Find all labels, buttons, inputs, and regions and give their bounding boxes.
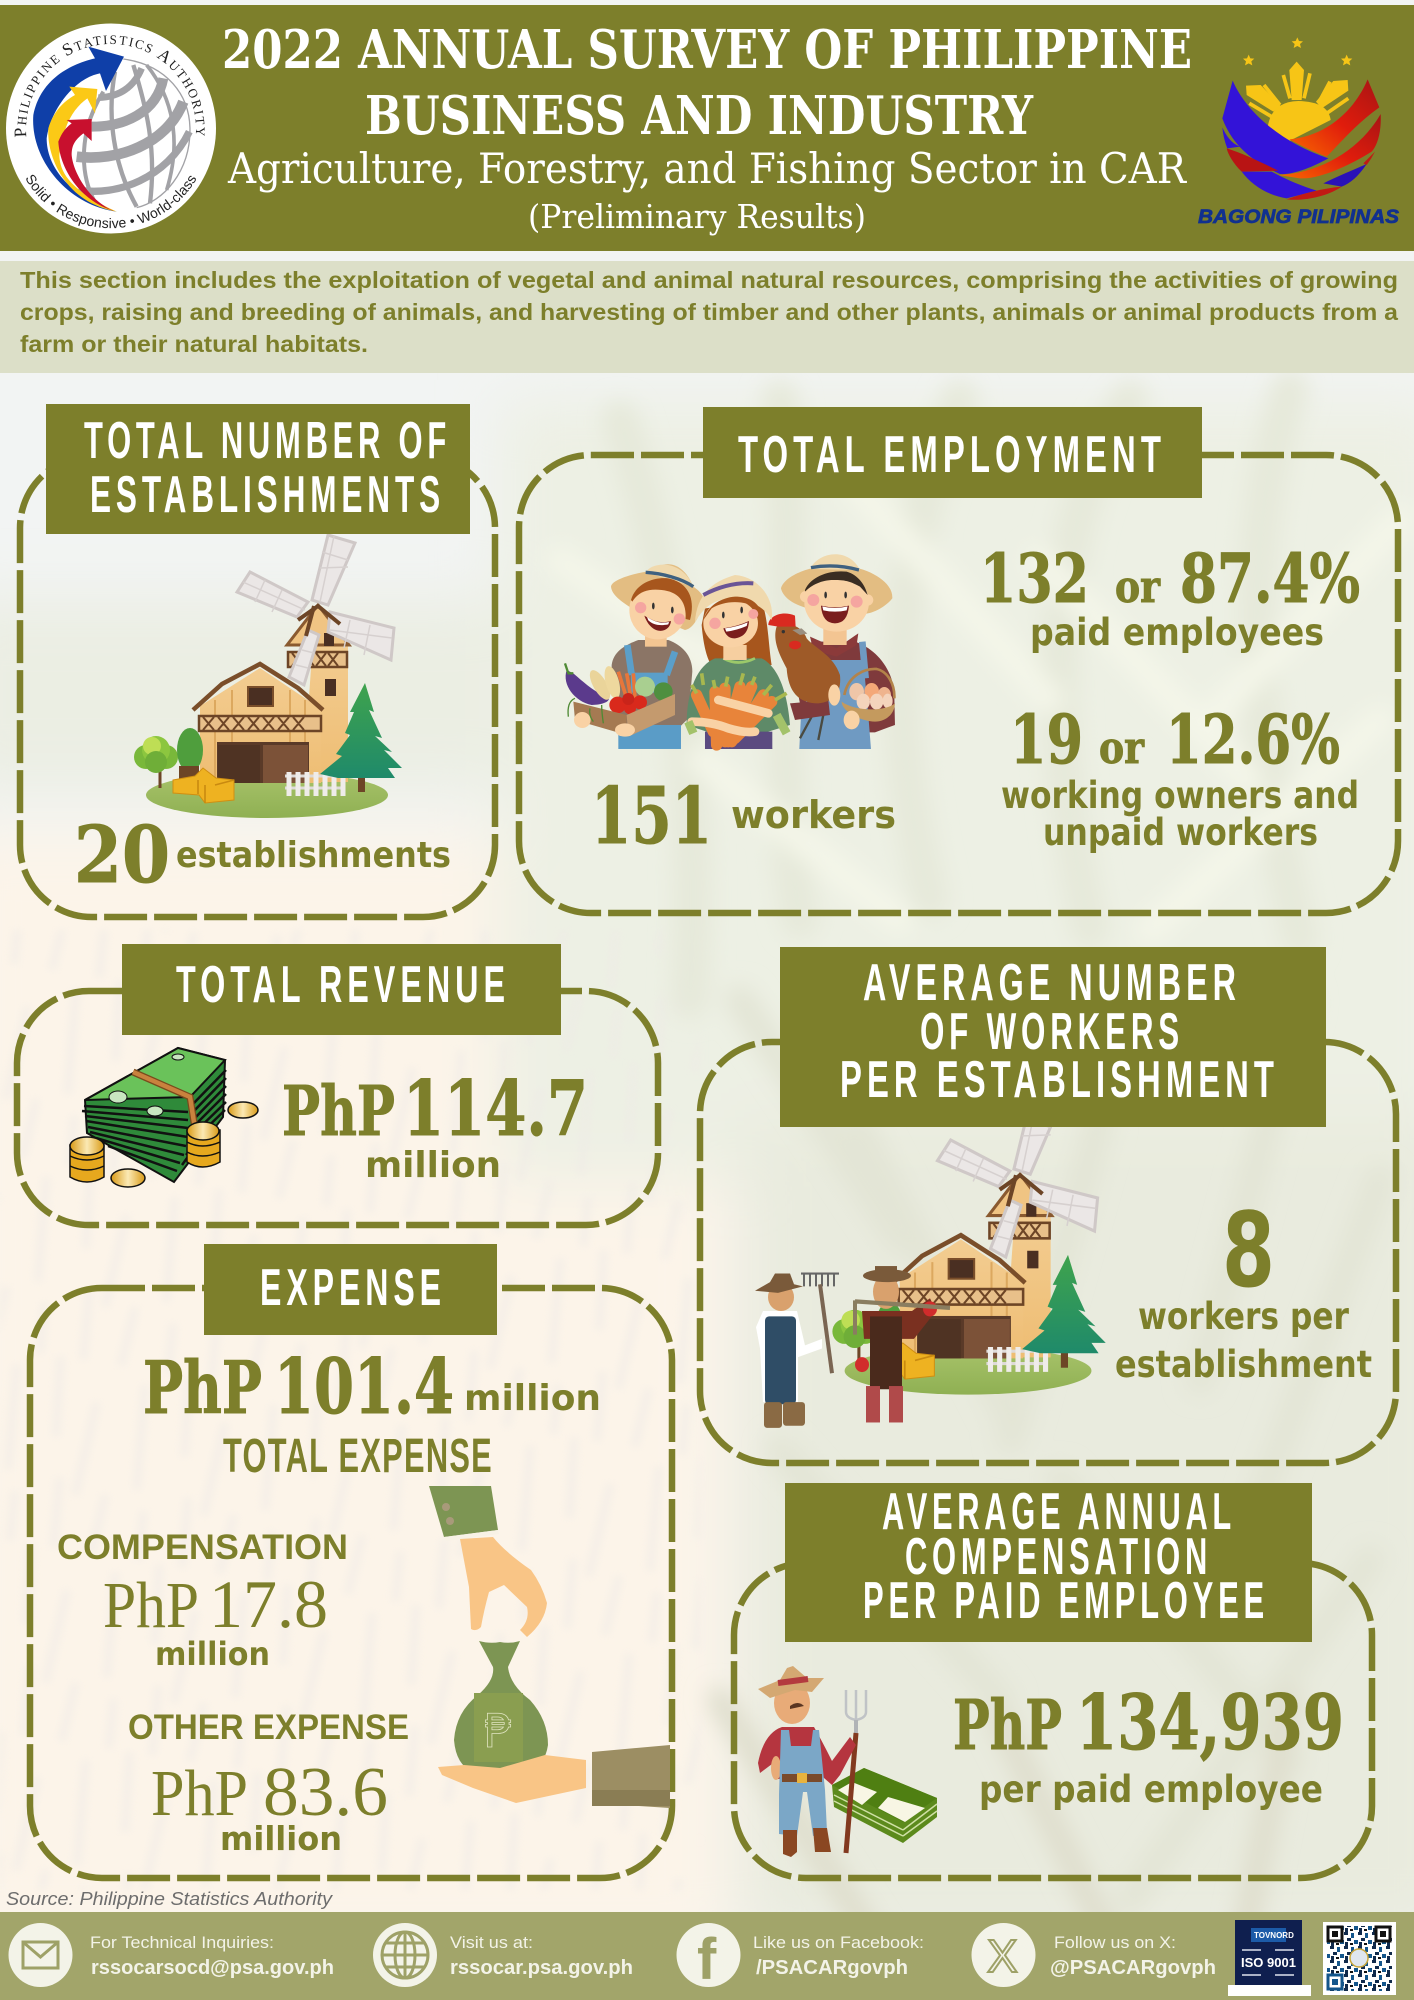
intro text band: This section includes the exploitation of vegetal and animal natural resources, comprising the activities of growing <box>20 267 1398 293</box>
stat: 151 workers <box>591 771 896 862</box>
heading: total revenue <box>122 944 561 1035</box>
stat: 132 or 87.4% paid employees: 132 <box>980 539 1089 618</box>
stat: 151 workers: 151 <box>591 771 712 862</box>
stat: 8 workers per establishment <box>1115 1191 1372 1386</box>
contact: website <box>373 1923 633 1987</box>
stat: 132 or 87.4% paid employees: or <box>1115 562 1161 613</box>
panel: average number of workers per establishment <box>700 947 1396 1463</box>
stat: total expense: TOTAL EXPENSE <box>223 1430 493 1483</box>
farmer: man with vegetable crate <box>565 564 703 749</box>
contact: X: Follow us on X: <box>1054 1933 1176 1952</box>
heading: total number of establishments: TOTAL NUMBER OF <box>84 412 451 470</box>
title <box>222 19 1192 147</box>
heading: total employment: TOTAL EMPLOYMENT <box>738 426 1166 484</box>
heading: expense: EXPENSE <box>260 1259 446 1317</box>
panel: expense <box>30 1244 672 1878</box>
subtitle: Agriculture, Forestry, and Fishing Sector in CAR <box>227 144 1187 193</box>
intro text band <box>0 261 1414 373</box>
contact: X <box>972 1923 1216 1987</box>
stat: compensation: COMPENSATION <box>57 1528 348 1567</box>
stat: PhP 114.7 million: 114.7 <box>403 1064 588 1153</box>
stat: other expense: million <box>220 1819 342 1858</box>
stat: 20 establishments <box>74 810 451 901</box>
illustration: barn and windmill <box>134 535 402 818</box>
panel: total employment <box>519 407 1398 913</box>
source note: Source: Philippine Statistics Authority <box>6 1889 333 1909</box>
stat: 132 or 87.4% paid employees: 87.4% <box>1180 539 1360 618</box>
contact: technical inquiries <box>8 1923 334 1987</box>
stat: 19 or 12.6% working owners and unpaid workers: unpaid workers <box>1043 811 1318 854</box>
illustration: hands and money bag: ₱ <box>484 1704 513 1758</box>
stat: other expense: 83.6 <box>263 1754 388 1831</box>
stat: compensation: PhP <box>103 1569 199 1642</box>
title: BUSINESS AND INDUSTRY <box>365 85 1034 147</box>
stat: 8 workers per establishment: workers per <box>1138 1295 1350 1338</box>
stat: compensation: 17.8 <box>209 1566 328 1642</box>
contact: X: @PSACARgovph <box>1050 1957 1216 1979</box>
logo: Bagong Pilipinas: BAGONG PILIPINAS <box>1198 207 1399 228</box>
stat: 132 or 87.4% paid employees: paid employees <box>1030 611 1324 654</box>
logo: Philippine Statistics Authority seal <box>6 24 216 234</box>
heading: average annual compensation: COMPENSATION <box>905 1528 1212 1586</box>
panel: total revenue <box>17 944 658 1225</box>
intro text band: farm or their natural habitats. <box>20 331 368 357</box>
logo: Philippine Statistics Authority seal: PHILIPPINE STATISTICS AUTHORITY <box>14 35 205 138</box>
stat: 151 workers: workers <box>731 793 896 837</box>
logo: Bagong Pilipinas <box>1198 37 1399 228</box>
stat: PhP 134,939 per paid employee: PhP <box>953 1686 1062 1766</box>
contact: technical inquiries: rssocarsocd@psa.gov.ph <box>91 1957 334 1979</box>
stat: other expense: OTHER EXPENSE <box>128 1708 409 1747</box>
stat: PhP 134,939 per paid employee: 134,939 <box>1076 1678 1344 1767</box>
stat: 8 workers per establishment: establishment <box>1115 1343 1372 1386</box>
stat: 19 or 12.6% working owners and unpaid workers: 12.6% <box>1166 700 1340 779</box>
QR code <box>1323 1922 1396 1995</box>
badge: ISO 9001 certification: TOVNORD <box>1254 1931 1294 1940</box>
badge: ISO 9001 certification <box>1228 1920 1311 1996</box>
contact: facebook: /PSACARgovph <box>756 1957 908 1979</box>
stat: 19 or 12.6% working owners and unpaid workers <box>1001 700 1359 854</box>
stat: PhP 134,939 per paid employee: per paid employee <box>979 1768 1323 1811</box>
contact: X: X <box>987 1930 1018 1982</box>
contact: facebook <box>676 1923 924 1992</box>
illustration: barn and windmill <box>832 1102 1106 1395</box>
title: 2022 ANNUAL SURVEY OF PHILIPPINE <box>222 19 1192 81</box>
heading: average number of workers: OF WORKERS <box>920 1003 1184 1061</box>
illustration: farmer with pitchfork and cash <box>758 1666 937 1857</box>
stat: total expense: 101.4 <box>274 1342 454 1431</box>
stat: 20 establishments: establishments <box>176 835 451 876</box>
stat: 19 or 12.6% working owners and unpaid workers: working owners and <box>1001 774 1359 817</box>
stat: PhP 134,939 per paid employee <box>953 1678 1344 1811</box>
footer band <box>0 1912 1414 2000</box>
stat: 8 workers per establishment: 8 <box>1222 1191 1275 1311</box>
contact: website: Visit us at: <box>450 1933 533 1952</box>
stat: total expense: million <box>464 1378 601 1419</box>
heading: average number of workers <box>780 947 1326 1127</box>
stat: other expense: PhP <box>151 1757 248 1830</box>
subtitle: (Preliminary Results) <box>528 197 866 236</box>
stat: total expense: PhP <box>143 1345 262 1430</box>
stat: compensation <box>57 1528 348 1673</box>
stat: PhP 114.7 million: million <box>365 1145 501 1186</box>
stat: 132 or 87.4% paid employees <box>980 539 1360 654</box>
illustration: three farmers with produce <box>565 554 895 749</box>
stat: PhP 114.7 million <box>282 1064 588 1186</box>
illustration: farmer with gloves <box>855 1266 950 1422</box>
intro text band: crops, raising and breeding of animals, and harvesting of timber and other plants, animals or animal products from a <box>20 299 1399 325</box>
heading: total number of establishments: ESTABLISHMENTS <box>90 466 445 524</box>
heading: total number of establishments <box>46 404 470 534</box>
farmer: man holding hen and egg basket <box>768 554 895 749</box>
header banner <box>0 5 1414 251</box>
contact: website: rssocar.psa.gov.ph <box>450 1957 633 1979</box>
contact: technical inquiries: For Technical Inquiries: <box>90 1933 274 1952</box>
farmer: woman with carrots <box>687 575 790 749</box>
stat: 20 establishments: 20 <box>74 810 170 901</box>
subtitle <box>227 144 1187 236</box>
stat: 19 or 12.6% working owners and unpaid workers: or <box>1099 723 1145 774</box>
contact: facebook: Like us on Facebook: <box>753 1933 924 1952</box>
heading: total revenue: TOTAL REVENUE <box>176 956 510 1014</box>
heading: average annual compensation <box>785 1483 1312 1642</box>
stat: 19 or 12.6% working owners and unpaid workers: 19 <box>1010 700 1083 779</box>
heading: total employment <box>703 407 1202 498</box>
heading: expense <box>204 1244 497 1335</box>
logo: Philippine Statistics Authority seal: Solid • Responsive • World-class <box>26 174 196 228</box>
stat: compensation: million <box>155 1635 270 1673</box>
illustration: farmer with rake <box>755 1274 839 1428</box>
stat: other expense <box>128 1708 409 1858</box>
stat: total expense <box>143 1342 601 1483</box>
panel: total number of establishments <box>20 404 495 917</box>
panel: average annual compensation per paid employee <box>734 1483 1372 1878</box>
stat: PhP 114.7 million: PhP <box>282 1072 395 1152</box>
icon: stack of cash and coins <box>70 1048 258 1187</box>
badge: ISO 9001 certification: ISO 9001 <box>1241 1955 1296 1970</box>
illustration: hands and money bag <box>429 1486 670 1808</box>
contact: facebook: f <box>697 1927 717 1992</box>
